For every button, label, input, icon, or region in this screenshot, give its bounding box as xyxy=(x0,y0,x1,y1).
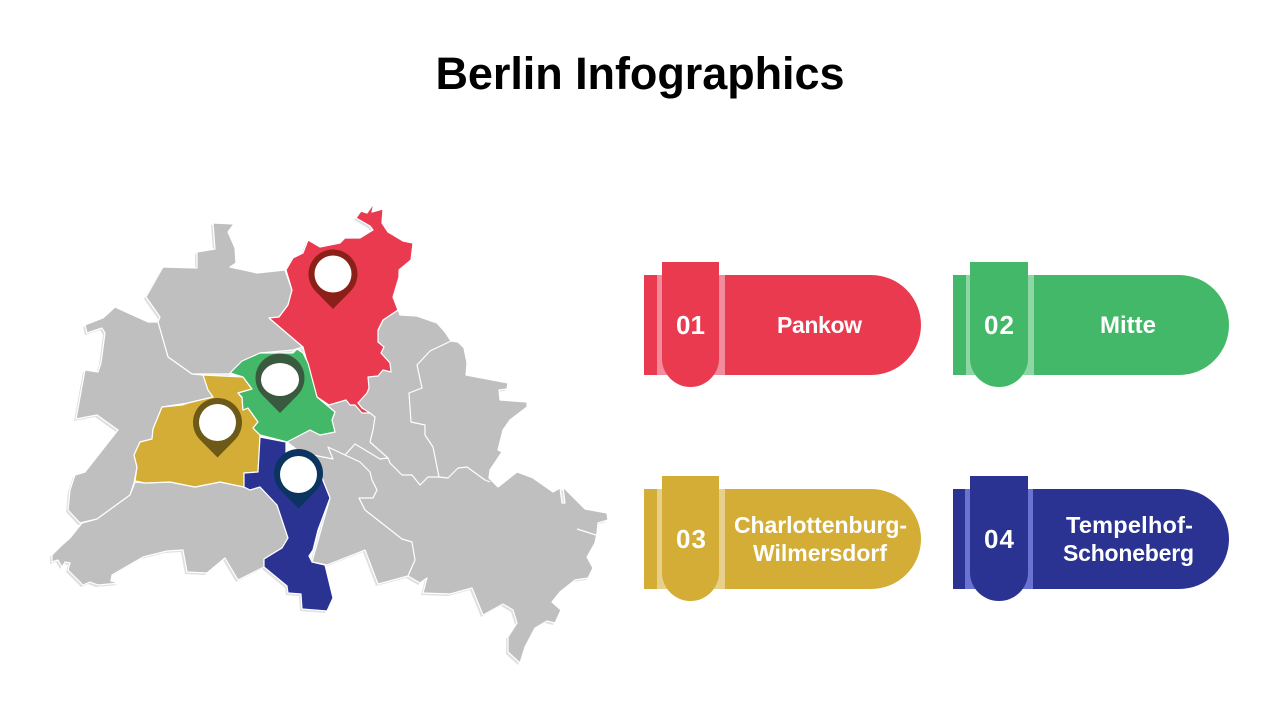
district: Pankow xyxy=(269,203,413,413)
district: Charlottenburg-Wilmersdorf xyxy=(134,375,260,487)
card 04: Tempelhof-Schoneberg: Schoneberg xyxy=(1063,540,1194,566)
map pin: Pankow xyxy=(308,250,358,309)
district: Spandau xyxy=(68,307,213,523)
map pin: Tempelhof-Schoneberg xyxy=(274,449,323,508)
card 01: Pankow: 01 xyxy=(676,310,705,340)
card 02: Mitte: Mitte xyxy=(1100,312,1156,339)
district: Steglitz-Zehlendorf xyxy=(52,482,288,585)
map pin: Mitte xyxy=(256,354,304,413)
card 04: Tempelhof-Schoneberg: 04 xyxy=(984,524,1015,554)
district: eastern boroughs xyxy=(286,310,608,663)
map pin: Charlottenburg-Wilmersdorf xyxy=(193,398,242,458)
card 02: Mitte xyxy=(953,262,1229,387)
card 02: Mitte: 02 xyxy=(984,310,1014,340)
title: Berlin Infographics xyxy=(436,48,844,99)
card 01: Pankow xyxy=(644,262,921,387)
card 01: Pankow: Pankow xyxy=(777,312,862,338)
district: Reinickendorf xyxy=(146,223,303,374)
card 03: Charlottenburg-Wilmersdorf: 03 xyxy=(676,524,706,554)
map of Berlin districts xyxy=(50,203,608,665)
card 04: Tempelhof-Schoneberg: Tempelhof- xyxy=(1066,512,1193,538)
card 03: Charlottenburg-Wilmersdorf: Wilmersdorf xyxy=(753,540,887,566)
card 03: Charlottenburg-Wilmersdorf xyxy=(644,476,921,601)
card 04: Tempelhof-Schoneberg xyxy=(953,476,1229,601)
district: Tempelhof-Schoneberg xyxy=(244,437,333,611)
card 03: Charlottenburg-Wilmersdorf: Charlottenburg- xyxy=(734,512,907,538)
district: Mitte xyxy=(230,349,335,442)
